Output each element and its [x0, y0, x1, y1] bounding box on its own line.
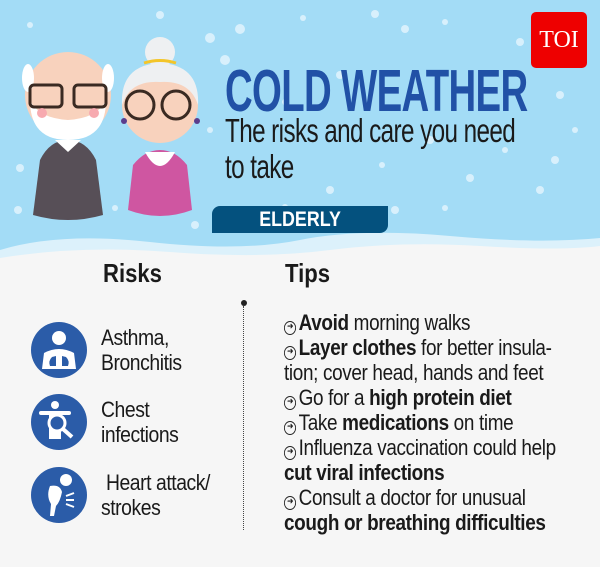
title: COLD WEATHER	[225, 58, 528, 124]
text: strokes	[101, 495, 160, 520]
risk: asthma	[31, 322, 182, 378]
tips list: Layer clothes for better insula-	[299, 335, 552, 360]
tips list: ➜	[287, 322, 293, 332]
heading: Tips: Tips	[285, 258, 330, 288]
subtitle: to take	[225, 148, 294, 185]
tag: ELDERLY: ELDERLY	[259, 208, 341, 231]
illustration: elderly couple	[22, 37, 200, 220]
logo: TOI	[531, 12, 587, 68]
logo: TOI: TOI	[539, 27, 579, 53]
icon: lungs	[31, 322, 87, 378]
tips list: ➜	[287, 497, 293, 507]
text: infections	[101, 422, 178, 447]
text: Heart attack/	[106, 470, 210, 495]
subtitle	[225, 112, 515, 185]
tips list: ➜	[287, 347, 293, 357]
text: Bronchitis	[101, 350, 182, 375]
tips list: cough or breathing difficulties	[284, 510, 546, 535]
subtitle: The risks and care you need	[225, 112, 515, 149]
icon: magnifier person	[31, 394, 87, 450]
tips list: ➜	[287, 422, 293, 432]
tips list: ➜	[287, 397, 293, 407]
tips list	[284, 310, 556, 535]
header background with snow	[0, 0, 600, 258]
tips list: Take medications on time	[299, 410, 513, 435]
tips list: ➜	[287, 447, 293, 457]
heading: Risks: Risks	[103, 258, 162, 288]
text	[101, 325, 182, 375]
tips list: Avoid morning walks	[299, 310, 470, 335]
tag: ELDERLY	[212, 206, 388, 233]
risk: heart	[31, 467, 210, 523]
tips list: Influenza vaccination could help	[299, 435, 556, 460]
tips list: tion; cover head, hands and feet	[284, 360, 543, 385]
text: Asthma,	[101, 325, 169, 350]
text	[101, 397, 178, 447]
tips list: cut viral infections	[284, 460, 444, 485]
tips list: Consult a doctor for unusual	[299, 485, 526, 510]
risk: chest	[31, 394, 178, 450]
tips list: Go for a high protein diet	[299, 385, 511, 410]
icon: person clutching	[31, 467, 87, 523]
divider	[241, 300, 247, 530]
text	[101, 470, 210, 520]
text: Chest	[101, 397, 149, 422]
